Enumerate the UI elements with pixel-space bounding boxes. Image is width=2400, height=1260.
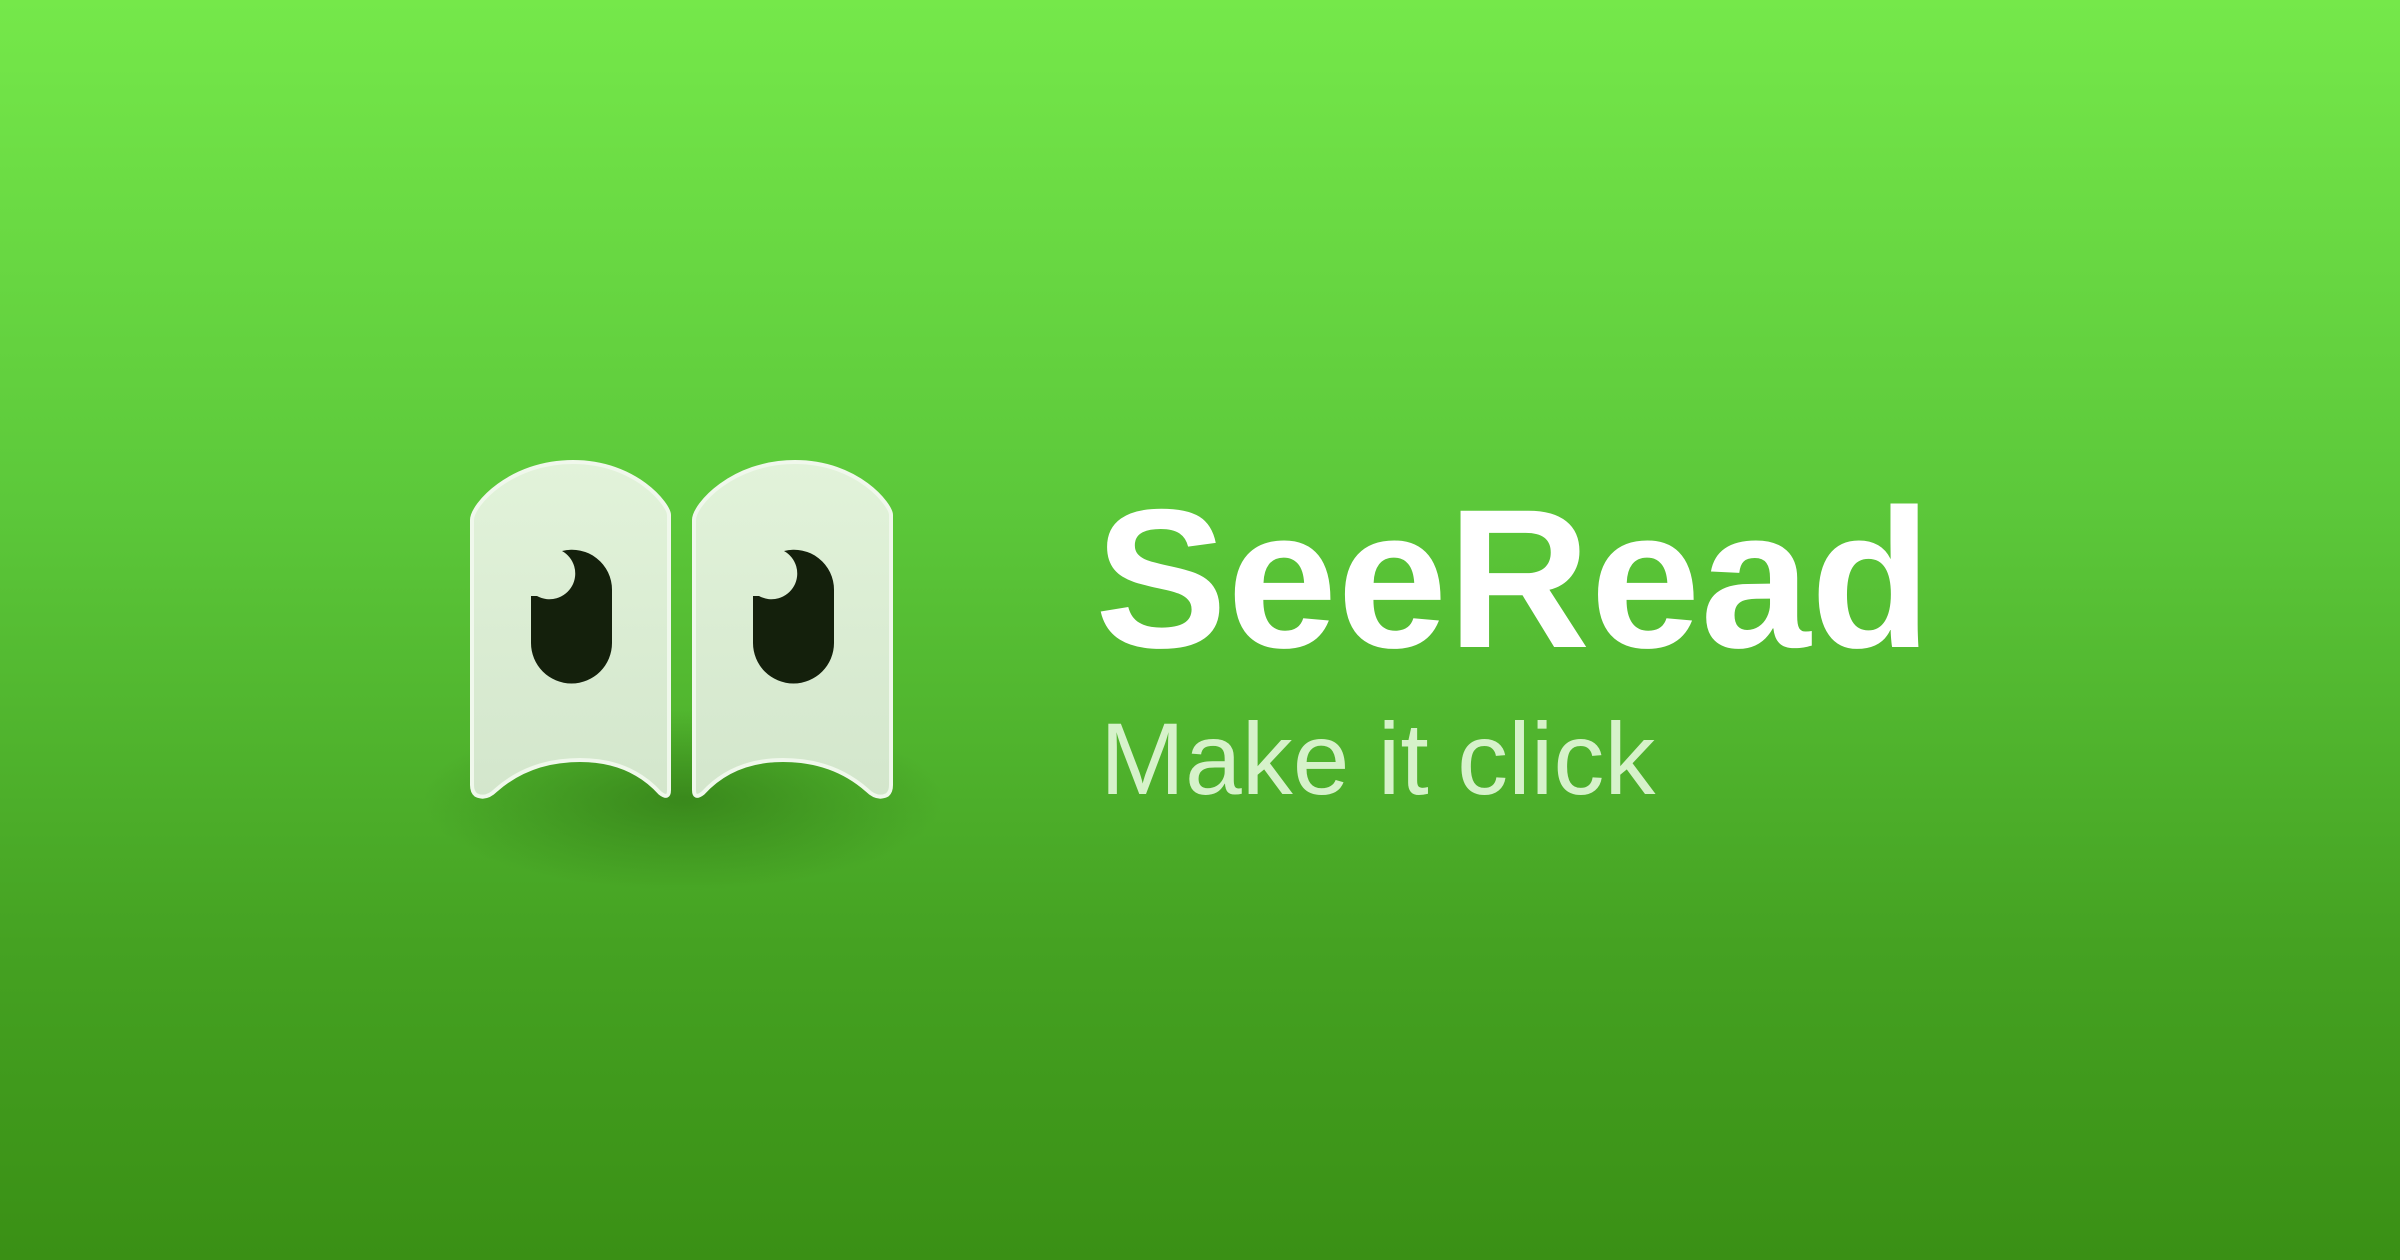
left eye (531, 550, 612, 684)
right eye (753, 550, 834, 684)
left page (472, 462, 669, 797)
title: SeeRead (1095, 468, 1931, 689)
tagline: Make it click (1100, 702, 1655, 816)
right page (694, 462, 891, 797)
